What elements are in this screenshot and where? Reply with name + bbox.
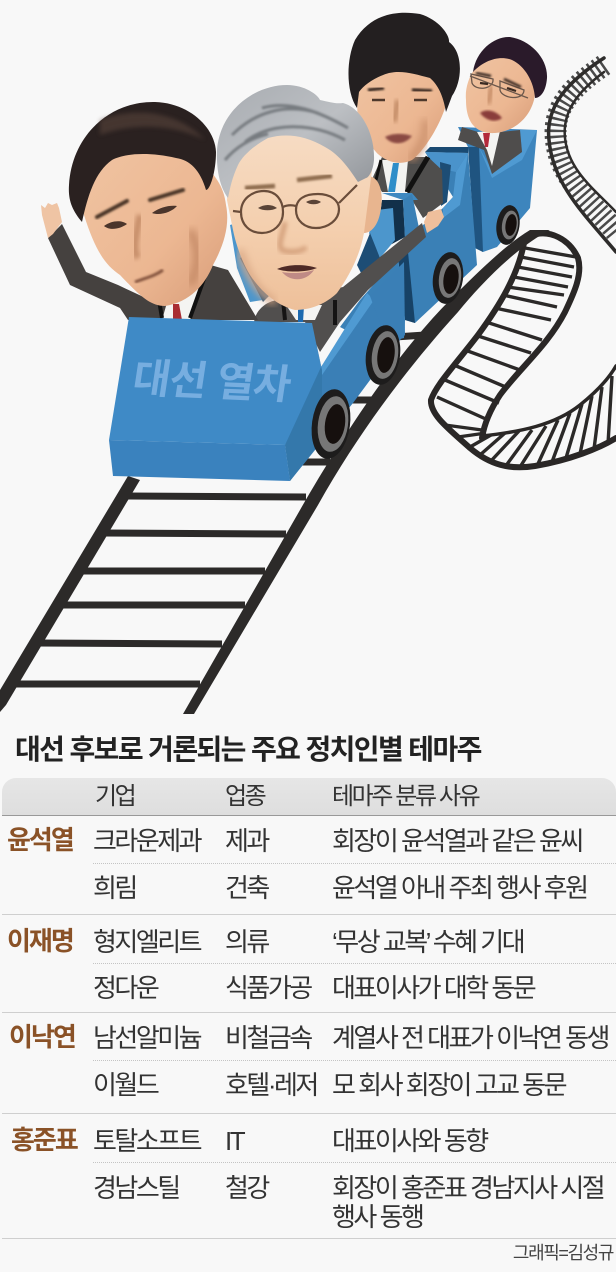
row group: 윤석열 bbox=[7, 825, 616, 903]
car 2 seat bbox=[230, 193, 420, 302]
row group: 윤석열: 윤석열 아내 주최 행사 후원 bbox=[332, 873, 587, 903]
row group: 이재명: 형지엘리트 bbox=[93, 927, 200, 957]
car 4 bbox=[458, 127, 537, 252]
roller coaster loop rails bbox=[431, 233, 616, 467]
suit: Lee Nak-yon bbox=[373, 157, 443, 218]
illustration: election train on roller coaster bbox=[0, 12, 616, 714]
table header bbox=[2, 778, 616, 816]
row group: 윤석열: 크라운제과 bbox=[93, 826, 200, 856]
head: Hong bbox=[466, 37, 547, 133]
row group: 이낙연: 호텔·레저 bbox=[225, 1070, 317, 1100]
row group: 홍준표: 회장이 홍준표 경남지사 시절 bbox=[332, 1173, 603, 1203]
row group: 이재명: 이재명 bbox=[7, 926, 73, 956]
head: Lee Jae-myung bbox=[217, 85, 382, 310]
row group: 이재명 bbox=[7, 926, 616, 1003]
wheel 2 bbox=[362, 323, 404, 387]
table bbox=[2, 778, 616, 1239]
row group: 윤석열: 회장이 윤석열과 같은 윤씨 bbox=[332, 826, 582, 856]
row group: 윤석열: 희림 bbox=[93, 873, 136, 903]
credit: 그래픽=김성규 bbox=[513, 1243, 613, 1263]
car 1 front bbox=[109, 317, 355, 481]
row group: 윤석열: 윤석열 bbox=[7, 825, 73, 855]
title: 대선 후보로 거론되는 주요 정치인별 테마주 bbox=[15, 734, 481, 765]
row group: 이낙연 bbox=[9, 1022, 616, 1100]
suit and arm: Lee Jae-myung bbox=[254, 209, 444, 352]
row group: 홍준표: 대표이사와 동향 bbox=[332, 1126, 487, 1156]
head: Yoon bbox=[69, 102, 227, 306]
row group: 홍준표 bbox=[11, 1125, 616, 1232]
row group: 홍준표: IT bbox=[225, 1126, 243, 1156]
row group: 이재명: 식품가공 bbox=[225, 973, 311, 1003]
row group: 윤석열: 제과 bbox=[225, 826, 268, 856]
row group: 이낙연: 남선알미늄 bbox=[93, 1023, 200, 1053]
car 1 side bbox=[285, 262, 405, 481]
row group: 이재명: ‘무상 교복’ 수혜 기대 bbox=[332, 927, 523, 957]
far right roller coaster strip bbox=[549, 58, 616, 252]
row group: 홍준표: 토탈소프트 bbox=[93, 1126, 200, 1156]
row group: 이낙연: 계열사 전 대표가 이낙연 동생 bbox=[332, 1023, 608, 1053]
row group: 홍준표: 철강 bbox=[225, 1173, 268, 1203]
wheel 4 bbox=[494, 204, 522, 246]
table header: 업종 bbox=[225, 783, 264, 810]
row group: 윤석열: 건축 bbox=[225, 873, 268, 903]
table header: 테마주 분류 사유 bbox=[332, 783, 478, 810]
row group: 이재명: 의류 bbox=[225, 927, 268, 957]
table header: 기업 bbox=[95, 783, 134, 810]
head: Lee Nak-yon bbox=[348, 13, 460, 163]
main track ties bbox=[12, 335, 425, 684]
car label: 대선 열차 bbox=[130, 355, 294, 408]
row group: 이재명: 대표이사가 대학 동문 bbox=[332, 973, 534, 1003]
hand bbox=[41, 203, 62, 238]
main track rails bbox=[0, 230, 550, 714]
row group: 이재명: 정다운 bbox=[93, 973, 157, 1003]
suit and arm: Yoon bbox=[41, 203, 258, 320]
row group: 홍준표: 행사 동행 bbox=[332, 1202, 422, 1232]
car 3 bbox=[340, 147, 477, 345]
hand bbox=[424, 209, 444, 233]
row group: 이낙연: 모 회사 회장이 고교 동문 bbox=[332, 1070, 565, 1100]
row group: 이낙연: 비철금속 bbox=[225, 1023, 311, 1053]
row group: 홍준표: 경남스틸 bbox=[93, 1173, 179, 1203]
wheel 3 bbox=[430, 250, 466, 306]
row group: 홍준표: 홍준표 bbox=[11, 1125, 77, 1155]
row group: 이낙연: 이낙연 bbox=[9, 1022, 75, 1052]
row group: 이낙연: 이월드 bbox=[93, 1070, 157, 1100]
wheel 1 bbox=[307, 387, 355, 461]
roller coaster loop ties bbox=[437, 248, 612, 467]
